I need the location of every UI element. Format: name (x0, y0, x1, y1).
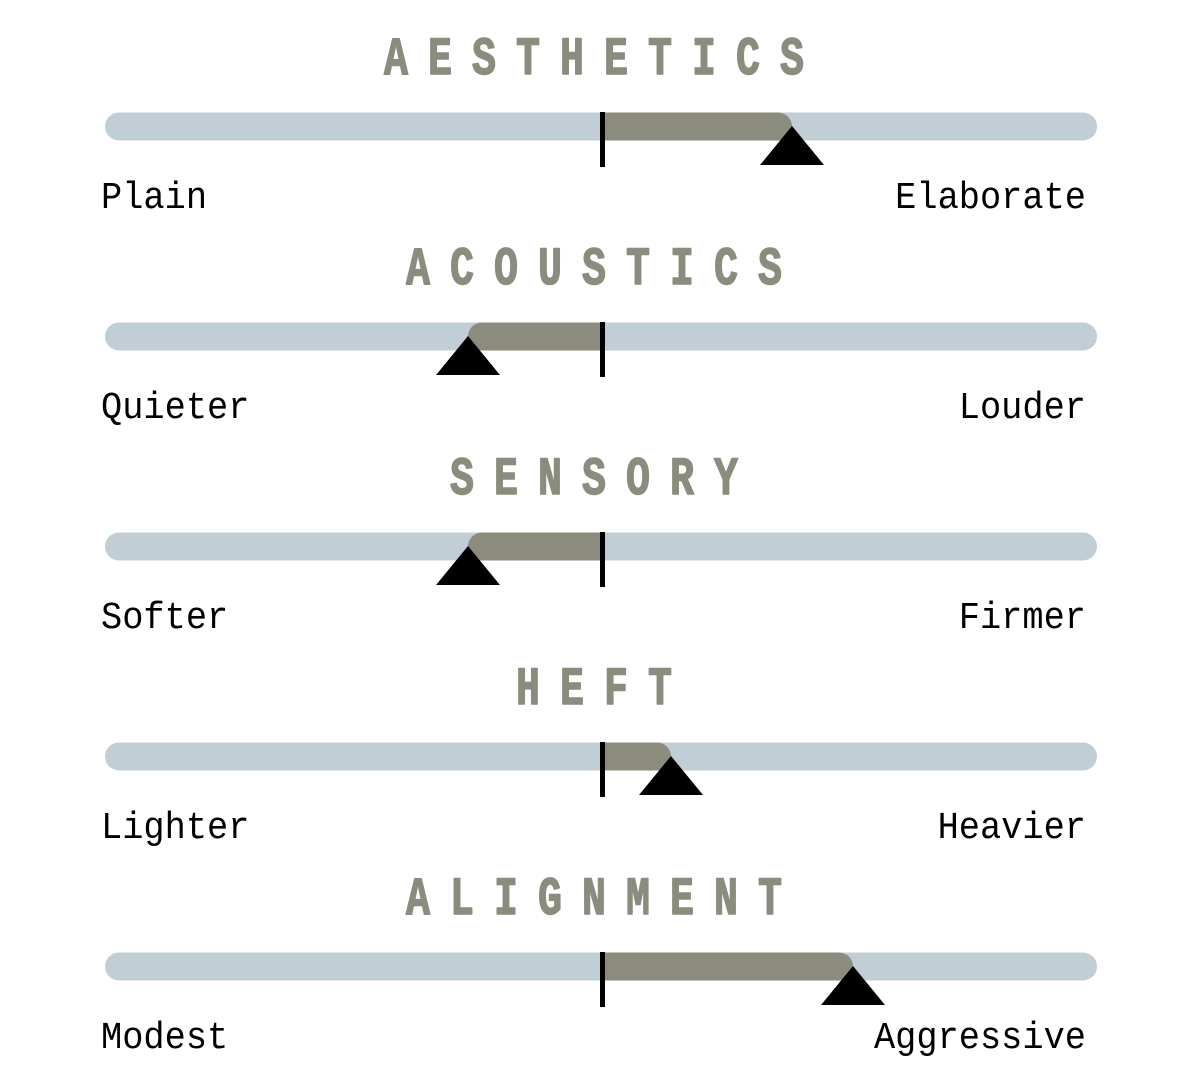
left label: lighter: Lighter (101, 807, 249, 850)
centre tick: sensory (600, 532, 605, 587)
track: acoustics (105, 322, 1097, 350)
marker: aesthetics (760, 126, 824, 165)
value bar: aesthetics (602, 112, 792, 140)
right label: aggressive: Aggressive (874, 1017, 1086, 1060)
panel: heft scale (101, 660, 1097, 850)
value bar: acoustics (468, 322, 602, 350)
panel: sensory scale (101, 450, 1097, 640)
panel: alignment scale (101, 870, 1097, 1060)
heading: alignment: ALIGNMENT (406, 870, 802, 931)
marker: alignment (821, 966, 885, 1005)
left label: plain: Plain (101, 177, 207, 220)
panel: acoustics scale (101, 240, 1097, 430)
left label: softer: Softer (101, 597, 228, 640)
centre tick: acoustics (600, 322, 605, 377)
heading: acoustics: ACOUSTICS (406, 240, 802, 301)
track: aesthetics (105, 112, 1097, 140)
centre tick: alignment (600, 952, 605, 1007)
right label: heavier: Heavier (938, 807, 1086, 850)
marker: acoustics (436, 336, 500, 375)
value bar: heft (602, 742, 671, 770)
heading: aesthetics: AESTHETICS (384, 30, 824, 91)
value bar: alignment (602, 952, 853, 980)
right label: firmer: Firmer (959, 597, 1086, 640)
right label: elaborate: Elaborate (895, 177, 1086, 220)
marker: heft (639, 756, 703, 795)
track: heft (105, 742, 1097, 770)
panel: aesthetics scale (101, 30, 1097, 220)
track: sensory (105, 532, 1097, 560)
centre tick: aesthetics (600, 112, 605, 167)
value bar: sensory (468, 532, 602, 560)
heading: heft: HEFT (516, 660, 692, 721)
centre tick: heft (600, 742, 605, 797)
heading: sensory: SENSORY (450, 450, 758, 511)
right label: louder: Louder (959, 387, 1086, 430)
left label: modest: Modest (101, 1017, 228, 1060)
marker: sensory (436, 546, 500, 585)
track: alignment (105, 952, 1097, 980)
left label: quieter: Quieter (101, 387, 249, 430)
